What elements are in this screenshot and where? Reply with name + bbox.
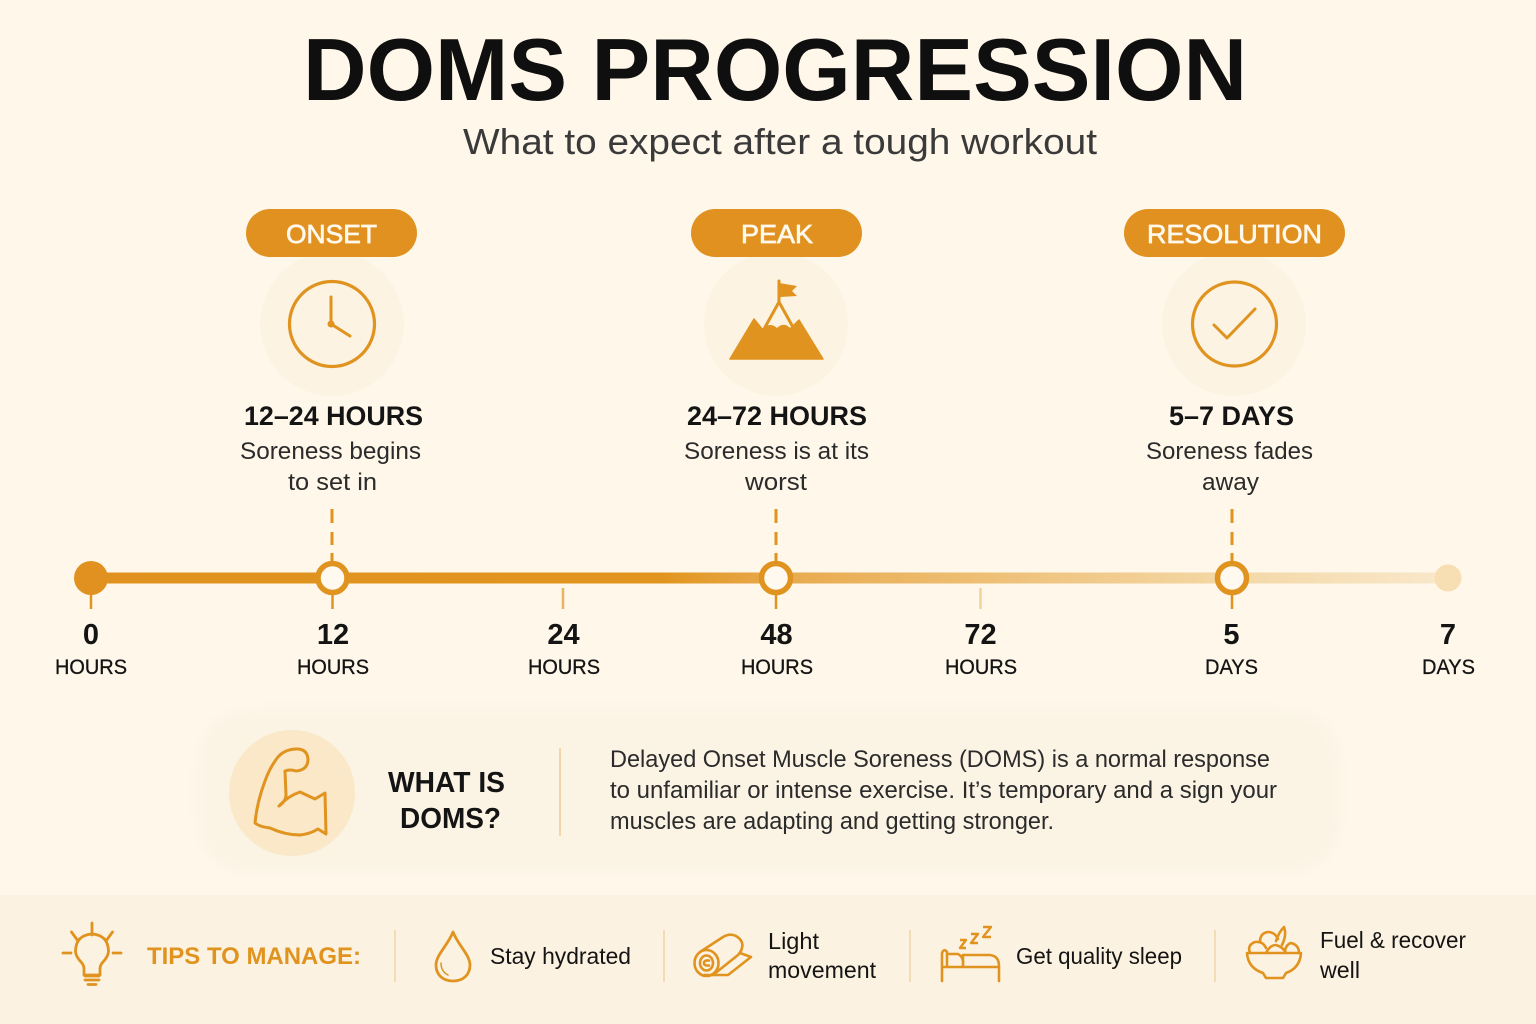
subtitle: What to expect after a tough workout bbox=[463, 121, 1097, 162]
axis label: 72 hours bbox=[945, 619, 1017, 679]
text: resolution description: away bbox=[1202, 469, 1259, 496]
pill: peak: PEAK bbox=[741, 219, 814, 249]
label: well bbox=[1319, 957, 1360, 983]
dividers bbox=[395, 930, 1215, 982]
divider bbox=[559, 748, 561, 836]
heading: what is DOMS bbox=[388, 767, 505, 835]
pill: onset bbox=[246, 209, 417, 257]
card background bbox=[200, 712, 1338, 870]
axis label: 5 days: 5 bbox=[1223, 619, 1240, 651]
axis label: 24 hours bbox=[528, 619, 600, 679]
label: Stay hydrated bbox=[490, 943, 631, 969]
text: DOMS explanation: to unfamiliar or intense exercise. It’s temporary and a sign your bbox=[610, 777, 1277, 804]
tips heading: TIPS TO MANAGE: bbox=[147, 943, 361, 970]
icon: flexed arm bbox=[229, 730, 355, 856]
pill: resolution: RESOLUTION bbox=[1147, 219, 1322, 249]
node: 12 hours bbox=[318, 564, 347, 592]
icon: bed with zzz bbox=[942, 927, 999, 981]
node: 48 hours bbox=[762, 564, 790, 592]
text: onset description: Soreness begins bbox=[240, 438, 421, 465]
icon circle: onset bbox=[260, 252, 404, 396]
axis label: 12 hours: HOURS bbox=[297, 656, 369, 679]
panel: resolution bbox=[1124, 209, 1345, 496]
icon: foam roller mat bbox=[694, 935, 751, 976]
icon: check circle bbox=[1192, 282, 1276, 366]
pill: onset: ONSET bbox=[286, 219, 377, 249]
title: DOMS PROGRESSION bbox=[303, 20, 1247, 119]
start node bbox=[74, 561, 108, 595]
heading: 5–7 days: 5–7 DAYS bbox=[1169, 401, 1294, 431]
axis label: 0 hours bbox=[55, 619, 127, 679]
icon: clock bbox=[290, 282, 374, 366]
icon: mountain with flag bbox=[730, 281, 823, 359]
axis label: 24 hours: HOURS bbox=[528, 656, 600, 679]
axis label: 72 hours: 72 bbox=[964, 619, 997, 651]
tip: fuel and recover bbox=[1247, 927, 1466, 983]
axis label: 24 hours: 24 bbox=[547, 619, 580, 651]
pill: peak bbox=[691, 209, 862, 257]
tip: stay hydrated bbox=[436, 932, 631, 981]
node: 5 days bbox=[1218, 564, 1246, 592]
text: DOMS explanation: muscles are adapting and getting stronger. bbox=[610, 808, 1054, 835]
text: peak description: worst bbox=[744, 469, 807, 496]
label bbox=[768, 928, 877, 983]
text: resolution description bbox=[1146, 438, 1313, 496]
icon: food bowl bbox=[1247, 927, 1301, 978]
text: onset description bbox=[240, 438, 421, 496]
label bbox=[1319, 927, 1466, 983]
timeline bbox=[55, 509, 1475, 679]
pill: resolution bbox=[1124, 209, 1345, 257]
panel: tips bar bbox=[0, 895, 1536, 1024]
heading: 12–24 hours: 12–24 HOURS bbox=[244, 401, 423, 431]
text: peak description bbox=[684, 438, 869, 496]
label: movement bbox=[768, 957, 877, 983]
heading: what is DOMS: DOMS? bbox=[400, 803, 501, 835]
heading: 24–72 hours: 24–72 HOURS bbox=[687, 401, 867, 431]
axis label: 12 hours bbox=[297, 619, 369, 679]
tip: light movement bbox=[694, 928, 877, 983]
tip: quality sleep bbox=[942, 927, 1182, 981]
heading: what is DOMS: WHAT IS bbox=[388, 767, 505, 799]
axis label: 0 hours: HOURS bbox=[55, 656, 127, 679]
timeline track bbox=[91, 572, 1448, 584]
axis label: 12 hours: 12 bbox=[317, 619, 349, 651]
axis label: 0 hours: 0 bbox=[83, 619, 99, 651]
axis label: 48 hours bbox=[741, 619, 813, 679]
panel: peak bbox=[684, 209, 869, 496]
label: Get quality sleep bbox=[1016, 943, 1182, 969]
icon: water drop bbox=[436, 932, 470, 981]
panel: what is DOMS bbox=[200, 712, 1338, 870]
panel: onset bbox=[240, 209, 423, 496]
axis label: 5 days bbox=[1205, 619, 1258, 679]
axis label: 7 days: 7 bbox=[1440, 619, 1456, 651]
axis label: 72 hours: HOURS bbox=[945, 656, 1017, 679]
axis label: 48 hours: 48 bbox=[760, 619, 793, 651]
text: DOMS explanation: Delayed Onset Muscle Soreness (DOMS) is a normal response bbox=[610, 746, 1270, 773]
axis label: 5 days: DAYS bbox=[1205, 656, 1258, 679]
icon circle: resolution bbox=[1162, 252, 1306, 396]
axis label: 7 days bbox=[1422, 619, 1475, 679]
dashed connectors bbox=[332, 509, 1232, 561]
tips background bbox=[0, 895, 1536, 1024]
text: onset description: to set in bbox=[288, 469, 377, 496]
ticks bbox=[91, 588, 1232, 609]
label: Fuel & recover bbox=[1320, 927, 1466, 953]
icon circle: peak bbox=[704, 252, 848, 396]
end node bbox=[1434, 564, 1462, 592]
axis label: 48 hours: HOURS bbox=[741, 656, 813, 679]
label: Light bbox=[768, 928, 820, 954]
text: DOMS explanation bbox=[610, 746, 1277, 835]
text: resolution description: Soreness fades bbox=[1146, 438, 1313, 465]
icon: light bulb bbox=[63, 923, 121, 984]
text: peak description: Soreness is at its bbox=[684, 438, 869, 465]
axis label: 7 days: DAYS bbox=[1422, 656, 1475, 679]
